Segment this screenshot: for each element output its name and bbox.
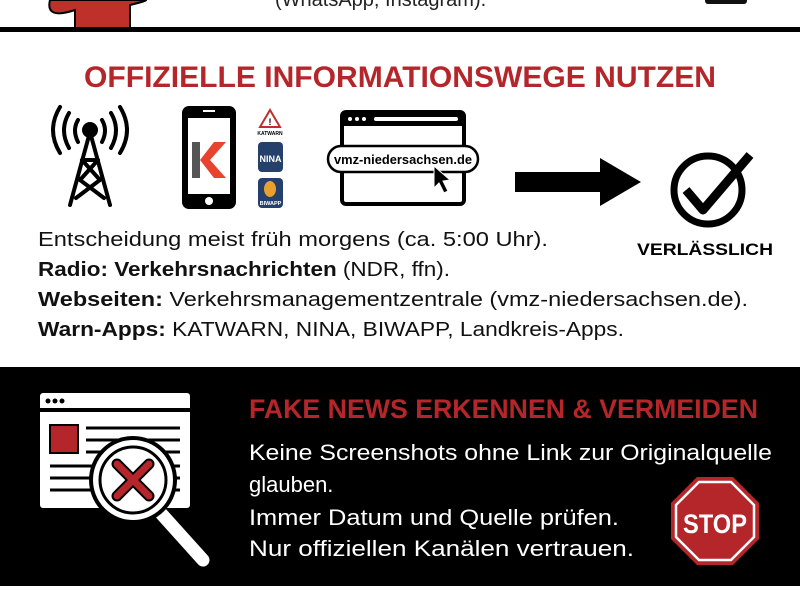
- icon: browser with url: vmz-niedersachsen.de: [334, 152, 472, 167]
- badge: nina: NINA: [260, 154, 282, 164]
- icon: checkmark: [674, 155, 750, 224]
- text block: info sources: [38, 229, 748, 341]
- icon: browser with url: [328, 112, 478, 204]
- text block: info sources: Radio: Verkehrsnachrichten (NDR, ffn).: [38, 259, 450, 281]
- text block: fake news tips: Keine Screenshots ohne Link zur Originalquelle: [249, 440, 772, 465]
- icon: radio tower: [53, 107, 127, 205]
- heading: fake news: FAKE NEWS ERKENNEN & VERMEIDEN: [249, 394, 758, 424]
- text block: fake news tips: Immer Datum und Quelle prüfen.: [249, 505, 619, 530]
- icon: red figure: [49, 0, 146, 28]
- panel: fake news: [0, 367, 800, 586]
- badge: katwarn: KATWARN: [257, 131, 283, 137]
- badge: katwarn: !: [268, 117, 272, 127]
- icon: phone with katwarn logo: [182, 106, 236, 209]
- title: offizielle informationswege: OFFIZIELLE INFORMATIONSWEGE NUTZEN: [84, 61, 716, 94]
- text block: fake news tips: Nur offiziellen Kanälen vertrauen.: [249, 536, 634, 561]
- text block: fake news tips: [249, 440, 772, 561]
- text block: info sources: Entscheidung meist früh morgens (ca. 5:00 Uhr).: [38, 229, 548, 251]
- icon: stop sign: STOP: [683, 509, 747, 539]
- icon: browser with magnifier: [40, 393, 203, 560]
- arrow: [515, 158, 641, 206]
- top strip remnant: [0, 0, 800, 32]
- icon: app badges: [257, 110, 283, 208]
- text block: fake news tips: glauben.: [249, 472, 333, 497]
- badge: katwarn: [257, 110, 283, 137]
- text block: info sources: Warn-Apps: KATWARN, NINA, BIWAPP, Landkreis-Apps.: [38, 319, 624, 341]
- icon: stop sign: [671, 477, 759, 565]
- label: verlässlich: VERLÄSSLICH: [637, 240, 773, 259]
- badge: biwapp: BIWAPP: [260, 201, 282, 207]
- icon: dark box: [705, 0, 747, 4]
- text block: info sources: Webseiten: Verkehrsmanagementzentrale (vmz-niedersachsen.de).: [38, 289, 748, 311]
